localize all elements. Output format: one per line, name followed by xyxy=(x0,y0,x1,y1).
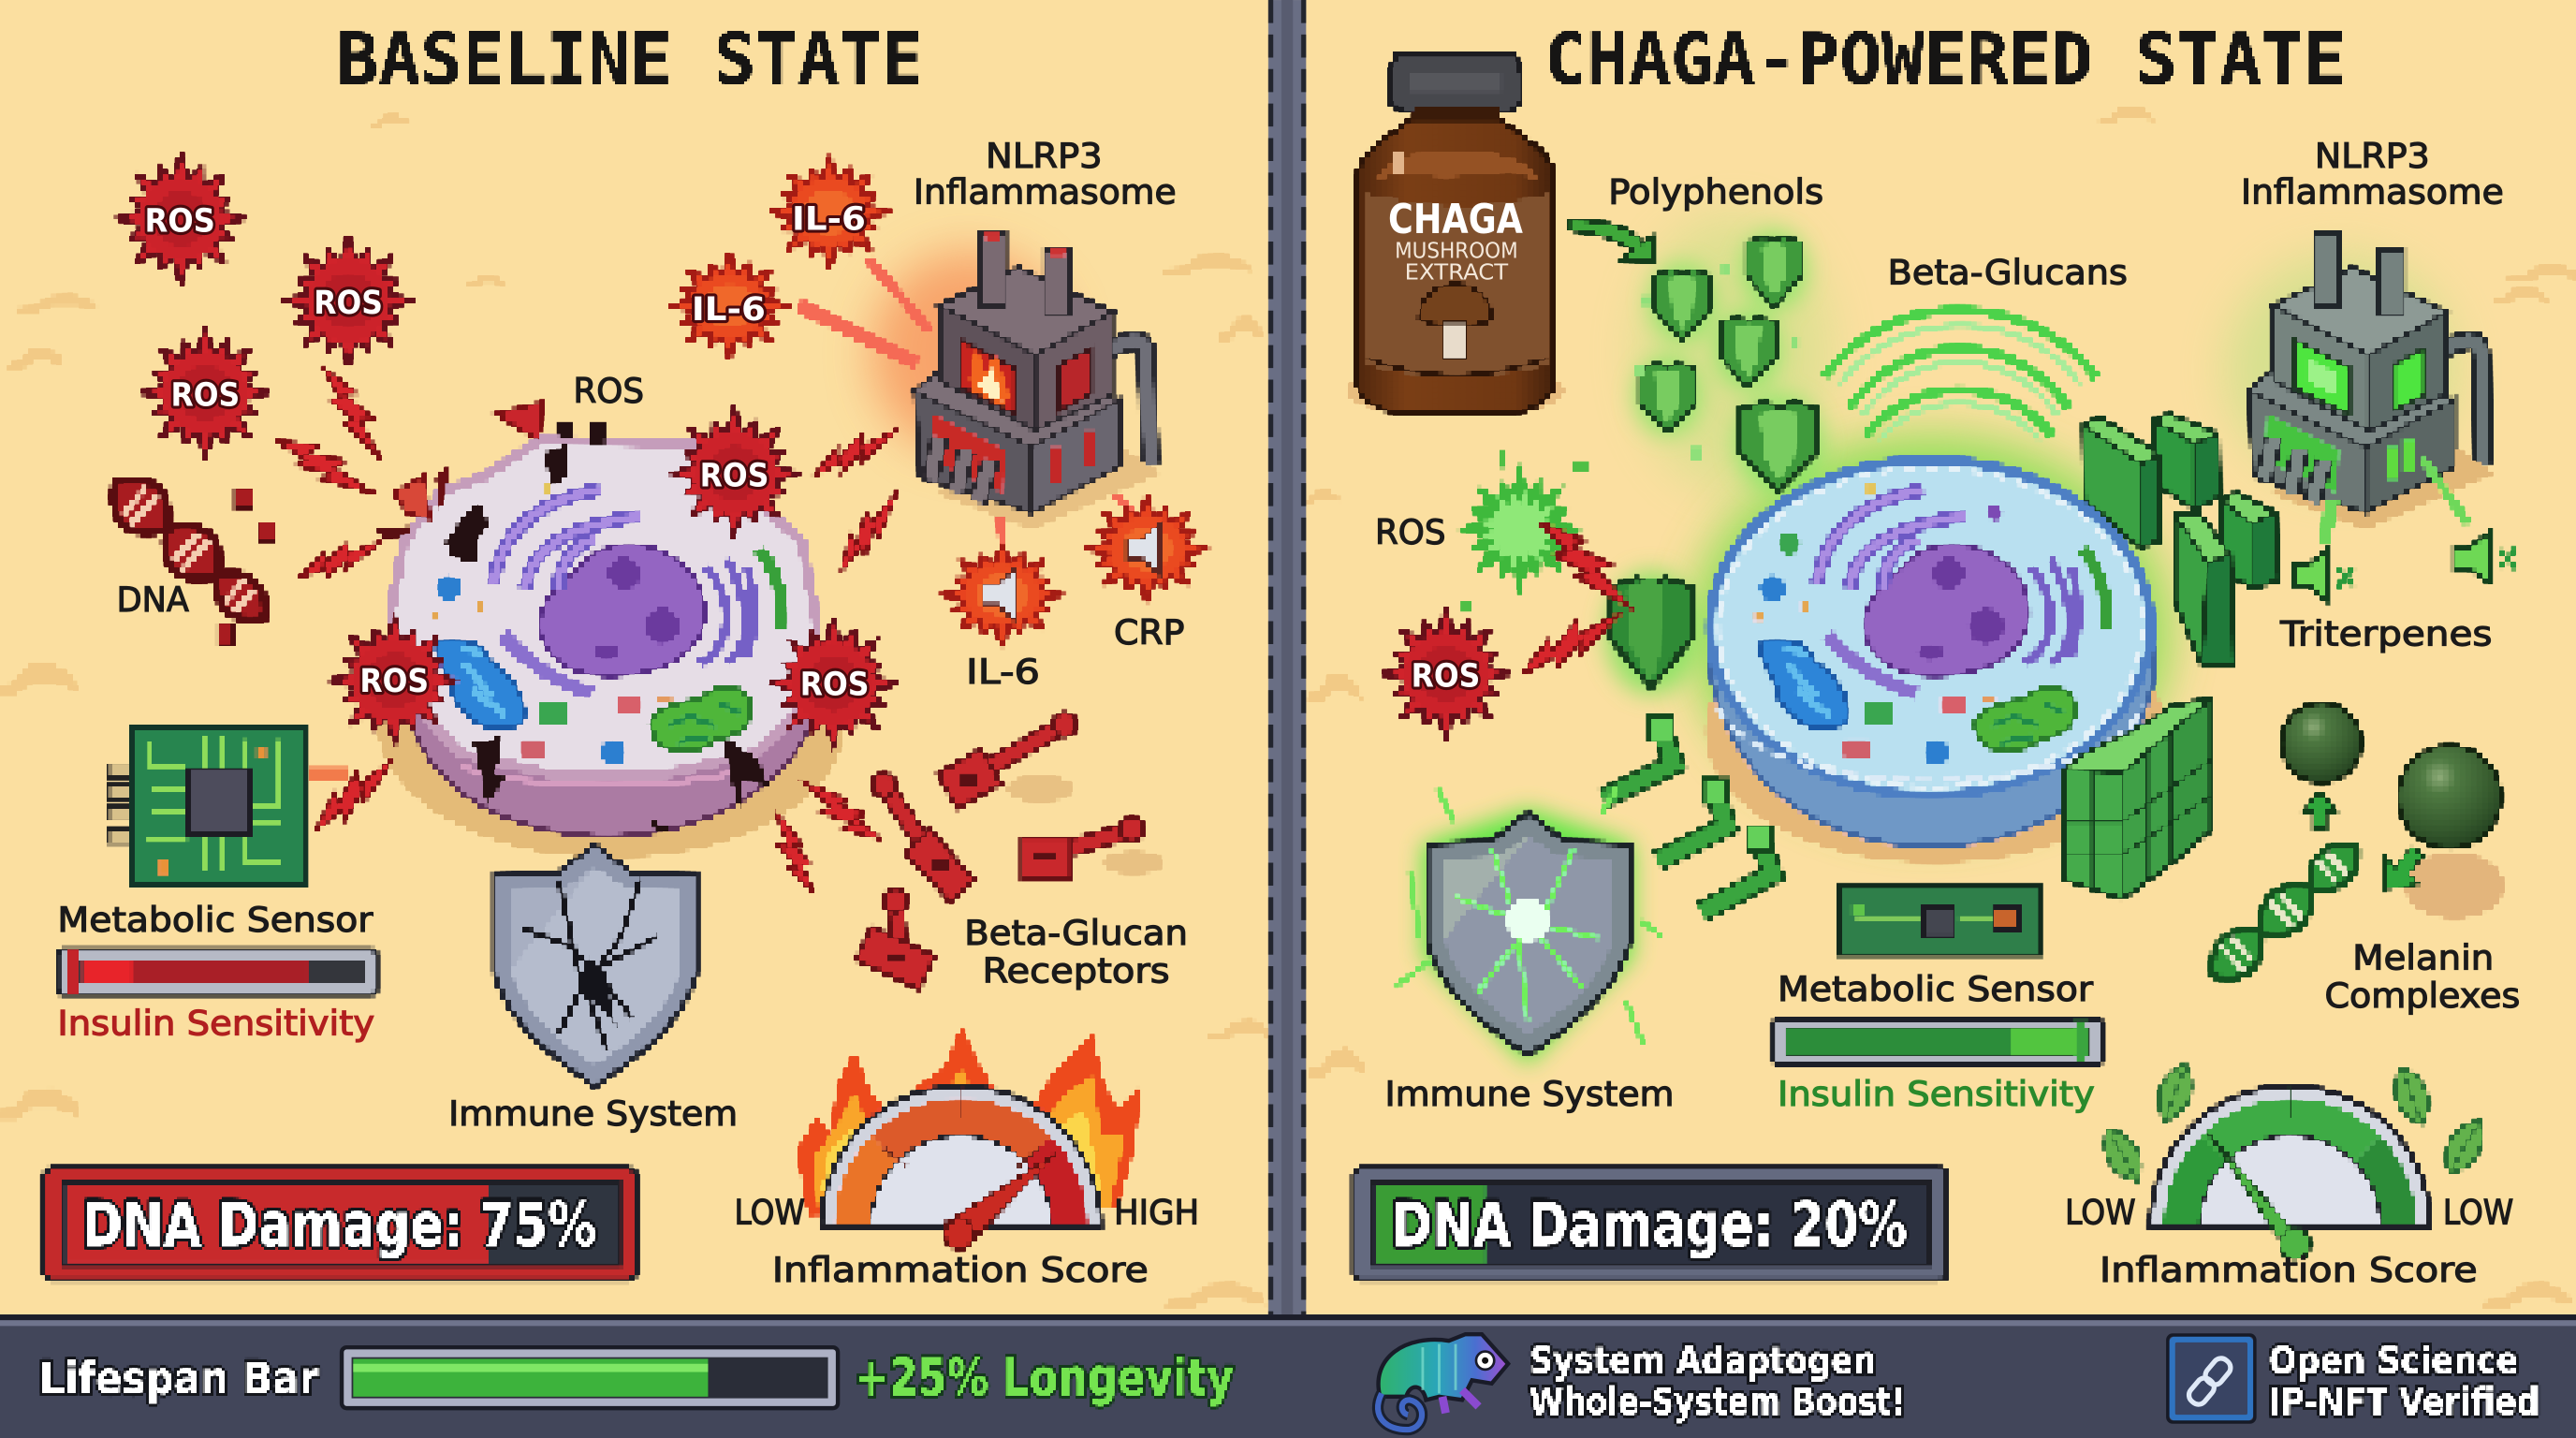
label: Beta-Glucan: Beta-Glucan xyxy=(964,913,1188,953)
label: Beta-Glucans: Beta-Glucans xyxy=(1888,253,2128,293)
soft glows xyxy=(871,213,2456,1064)
label: ROS 4: ROS xyxy=(700,457,768,495)
label: Inflammasome right: Inflammasome xyxy=(2241,172,2504,213)
bottom status bar xyxy=(0,1314,2576,1438)
metabolic sensor chip xyxy=(109,728,304,884)
speaker bursts: IL-6 and CRP xyxy=(942,496,1208,646)
arrow from bottle xyxy=(1569,220,1653,261)
cracked immune shield xyxy=(494,844,696,1086)
beams from inflammasome to cytokines xyxy=(797,257,1134,552)
label: ROS 5: ROS xyxy=(359,662,429,700)
label: Polyphenols: Polyphenols xyxy=(1608,172,1823,213)
label: Insulin Sensitivity left: Insulin Sensitivity xyxy=(57,1004,374,1044)
label: ROS 2: ROS xyxy=(314,284,383,322)
label: ROS right: ROS xyxy=(1412,657,1480,696)
bottom label: longevity gain: +25% Longevity xyxy=(855,1348,1234,1407)
label: bottle MUSHROOM: MUSHROOM xyxy=(1395,240,1518,264)
chaga extract bottle xyxy=(1347,56,1564,418)
label: gauge HIGH: HIGH xyxy=(1114,1193,1199,1233)
insulin sensitivity bar high xyxy=(1775,1019,2101,1064)
bottom label: whole-system boost: Whole-System Boost! xyxy=(1530,1380,1906,1424)
label: NLRP3 left: NLRP3 xyxy=(986,136,1103,176)
label: Complexes: Complexes xyxy=(2324,976,2520,1016)
label: Metabolic Sensor right: Metabolic Sensor xyxy=(1778,969,2094,1009)
beta-glucan receptors xyxy=(856,713,1164,989)
IL-6 bursts xyxy=(670,156,889,358)
label: IL-6 burst 2: IL-6 xyxy=(692,290,766,329)
label: Metabolic Sensor left: Metabolic Sensor xyxy=(57,900,373,940)
healthy NLRP3 inflammasome machine xyxy=(2249,233,2494,542)
DNA damage bar 75% xyxy=(44,1168,636,1280)
bottom label: open science: Open Science xyxy=(2269,1339,2519,1383)
label: Immune System left: Immune System xyxy=(448,1093,738,1134)
icon: chain link badge xyxy=(2168,1335,2255,1422)
lifespan bar gauge xyxy=(342,1347,838,1408)
label: ROS cell: ROS xyxy=(574,371,644,411)
damaged inflammation gauge xyxy=(797,1027,1142,1249)
center divider xyxy=(1268,0,1306,1318)
DNA damage value 20%: DNA Damage: 20% xyxy=(1392,1190,1908,1260)
label: ROS 6: ROS xyxy=(800,665,869,703)
defending shield xyxy=(1611,579,1690,687)
label: ROS 1: ROS xyxy=(144,201,215,240)
NLRP3 inflammasome machine xyxy=(915,233,1160,529)
DNA damage value 75%: DNA Damage: 75% xyxy=(82,1190,596,1260)
label: IL-6: IL-6 xyxy=(966,652,1040,692)
lightning bolts xyxy=(269,360,905,898)
metabolic sensor module xyxy=(1838,888,2039,955)
label: bottle CHAGA: CHAGA xyxy=(1388,196,1523,243)
labels layer xyxy=(57,136,2520,1290)
damaged cell xyxy=(378,424,844,858)
label: NLRP3 right: NLRP3 xyxy=(2315,136,2430,176)
title: baseline state: BASELINE STATE xyxy=(337,19,923,101)
panel: chaga-powered state artwork xyxy=(1347,56,2515,1280)
red attack bolts xyxy=(1513,508,1645,686)
beta-glucan waves xyxy=(1825,310,2097,440)
label: Immune System right: Immune System xyxy=(1385,1074,1674,1114)
DNA damage bar 20% xyxy=(1354,1168,1947,1280)
insulin sensitivity bar low xyxy=(57,949,376,994)
label: gauge LOW: LOW xyxy=(735,1193,805,1233)
green wall xyxy=(2063,698,2211,899)
melanin spheres xyxy=(2282,703,2504,918)
label: ROS right plain: ROS xyxy=(1375,512,1445,552)
bottom label: lifespan bar: Lifespan Bar xyxy=(39,1353,319,1404)
title: chaga-powered state: CHAGA-POWERED STATE xyxy=(1544,19,2346,101)
green DNA helix xyxy=(2199,830,2371,991)
healthy inflammation gauge xyxy=(2149,1086,2432,1258)
ROS bursts xyxy=(117,153,897,749)
label: Receptors: Receptors xyxy=(983,951,1170,991)
label: DNA: DNA xyxy=(117,580,189,620)
label: CRP: CRP xyxy=(1114,612,1184,653)
broken DNA xyxy=(98,464,281,644)
polyphenol shields xyxy=(1634,237,1818,491)
label: Inflammasome left: Inflammasome xyxy=(914,172,1177,213)
leaves around gauge xyxy=(2095,1060,2492,1188)
label: Melanin: Melanin xyxy=(2352,938,2494,978)
ROS burst blocked xyxy=(1382,609,1510,740)
label: Insulin Sensitivity right: Insulin Sensitivity xyxy=(1778,1074,2095,1114)
green cytokine burst xyxy=(1456,452,1587,609)
label: gauge LOW right side: LOW xyxy=(2443,1193,2513,1233)
bottom label: system adaptogen: System Adaptogen xyxy=(1530,1339,1876,1383)
label: gauge LOW left side: LOW xyxy=(2065,1193,2136,1233)
triterpene blocks xyxy=(2083,414,2278,664)
label: IL-6 burst 1: IL-6 xyxy=(792,200,866,239)
muted speakers xyxy=(2293,533,2515,600)
label: Inflammation Score left: Inflammation Score xyxy=(772,1250,1149,1290)
icon: chameleon xyxy=(1378,1334,1508,1430)
label: bottle EXTRACT: EXTRACT xyxy=(1405,260,1508,285)
green receptors xyxy=(1603,716,1773,912)
label: Triterpenes: Triterpenes xyxy=(2279,614,2492,654)
healthy cell xyxy=(1705,460,2165,862)
panel: baseline state artwork xyxy=(44,153,1208,1280)
label: ROS 3: ROS xyxy=(171,376,240,415)
healing immune shield xyxy=(1397,785,1662,1055)
label: Inflammation Score right: Inflammation Score xyxy=(2100,1250,2478,1290)
